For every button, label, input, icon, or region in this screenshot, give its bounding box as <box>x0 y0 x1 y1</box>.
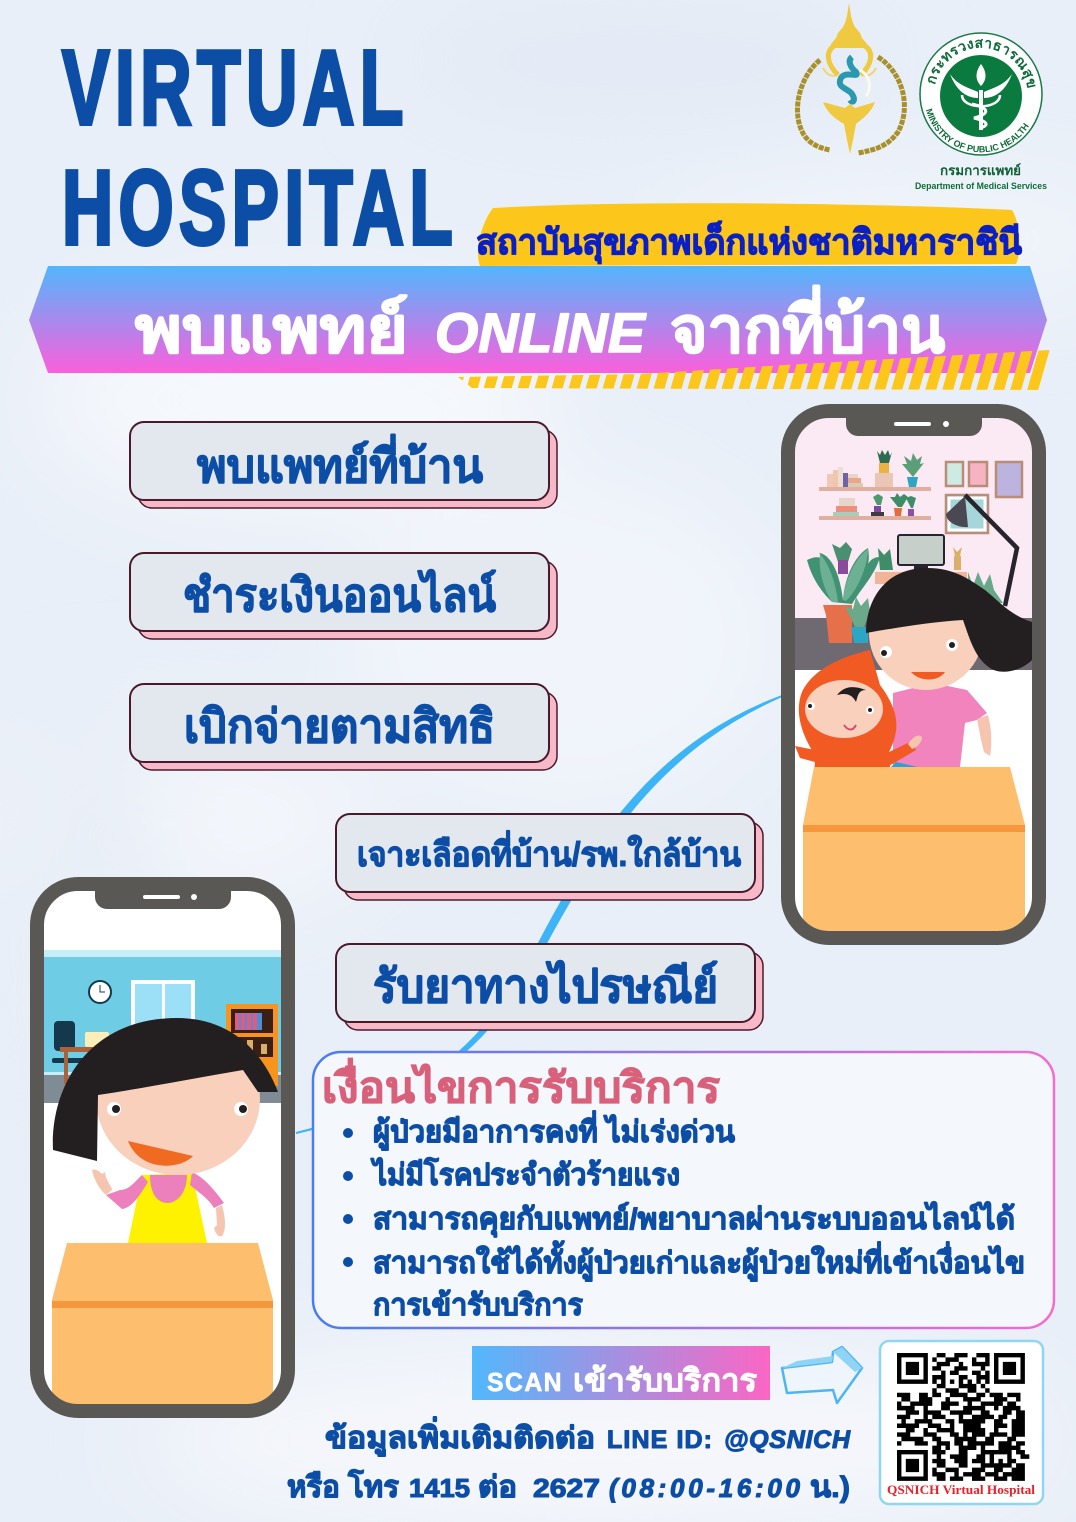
banner text <box>135 285 945 366</box>
mother figure <box>866 568 1032 767</box>
QR code <box>897 1353 1029 1481</box>
conditions list <box>343 1110 1025 1322</box>
banner text: พบแพทย์ <box>135 294 408 366</box>
cardboard box <box>52 1243 273 1404</box>
logo: Ministry of Public Health seal <box>919 32 1043 156</box>
department name: Department of Medical Services <box>915 181 1047 191</box>
picture frames <box>946 462 1022 533</box>
service button: medicine by post: รับยาทางไปรษณีย์ <box>373 960 718 1012</box>
logo: Ministry of Public Health seal: MINISTRY OF PUBLIC HEALTH <box>926 108 1029 152</box>
department name <box>915 163 1047 191</box>
conditions list: ผู้ป่วยมีอาการคงที่ ไม่เร่งด่วน <box>373 1110 735 1151</box>
girl figure <box>53 1018 278 1243</box>
child in red hood <box>795 650 922 790</box>
phone frame <box>37 884 288 1411</box>
title: VIRTUAL HOSPITAL <box>62 29 458 268</box>
contact information: ข้อมูลเพิ่มเติมติดต่อ <box>325 1416 595 1457</box>
arrow icon <box>782 1347 862 1403</box>
contact information: น.) <box>810 1471 850 1504</box>
window <box>133 982 193 1032</box>
scan button: เข้ารับบริการ <box>573 1363 757 1398</box>
contact information: LINE ID: <box>607 1426 712 1454</box>
desk monitor <box>875 535 967 584</box>
institute name on yellow brush: สถาบันสุขภาพเด็กแห่งชาติมหาราชินี <box>476 220 1022 264</box>
phone frame <box>788 411 1039 938</box>
service button: reimbursement <box>130 684 557 770</box>
service button: medicine by post <box>336 944 763 1030</box>
title: VIRTUAL HOSPITAL: VIRTUAL <box>62 29 409 147</box>
banner text: จากที่บ้าน <box>670 285 945 366</box>
bookshelf <box>226 1004 278 1086</box>
cardboard box <box>803 767 1025 931</box>
contact information: @QSNICH <box>724 1426 851 1454</box>
conditions list: การเข้ารับบริการ <box>373 1289 583 1322</box>
contact information <box>287 1416 851 1504</box>
conditions list: สามารถคุยกับแพทย์/พยาบาลผ่านระบบออนไลน์ได้ <box>373 1201 1015 1238</box>
desk lamp <box>946 495 1017 606</box>
contact information: 2627 <box>533 1473 600 1503</box>
wall shelves with books and plants <box>819 450 931 520</box>
conditions heading: เงื่อนไขการรับบริการ <box>322 1058 720 1111</box>
panel: service conditions <box>313 1052 1054 1328</box>
scan button <box>472 1346 770 1400</box>
service button: see doctor at home <box>130 422 557 508</box>
banner text: ONLINE <box>435 301 647 364</box>
hazard stripe band <box>458 350 1050 390</box>
service button: pay online <box>130 553 557 639</box>
service button: blood test <box>336 814 763 900</box>
institute name on yellow brush <box>476 203 1022 266</box>
contact information: (08:00-16:00 <box>609 1473 801 1503</box>
logo: Ministry of Public Health seal: กระทรวงสาธารณสุข <box>928 39 1036 88</box>
scan button: SCAN <box>487 1367 563 1397</box>
curved blue connector line <box>296 696 782 1133</box>
QR caption: QSNICH Virtual Hospital <box>887 1482 1035 1497</box>
contact information: ต่อ <box>478 1471 517 1504</box>
service button: see doctor at home: พบแพทย์ที่บ้าน <box>197 434 484 492</box>
desk, chair and laptop <box>52 1021 120 1084</box>
phone: girl at desk <box>37 884 288 1411</box>
QR code card <box>880 1341 1043 1504</box>
potted plants <box>807 542 1003 643</box>
main banner <box>29 266 1060 395</box>
conditions list: สามารถใช้ได้ทั้งผู้ป่วยเก่าและผู้ป่วยใหม่ที่เข้าเงื่อนไข <box>373 1240 1025 1282</box>
conditions list: ไม่มีโรคประจำตัวร้ายแรง <box>370 1156 680 1192</box>
title: VIRTUAL HOSPITAL: HOSPITAL <box>62 149 458 268</box>
service button: pay online: ชำระเงินออนไลน์ <box>183 569 497 621</box>
service button: reimbursement: เบิกจ่ายตามสิทธิ <box>184 700 495 752</box>
phone: mother and child <box>788 411 1039 938</box>
contact information: 1415 <box>409 1473 470 1503</box>
logo: royal gold emblem <box>797 3 904 154</box>
department name: กรมการแพทย์ <box>940 163 1021 178</box>
wall clock <box>89 981 111 1003</box>
contact information: หรือ โทร <box>287 1468 399 1504</box>
service button: blood test: เจาะเลือดที่บ้าน/รพ.ใกล้บ้าน <box>357 830 741 874</box>
